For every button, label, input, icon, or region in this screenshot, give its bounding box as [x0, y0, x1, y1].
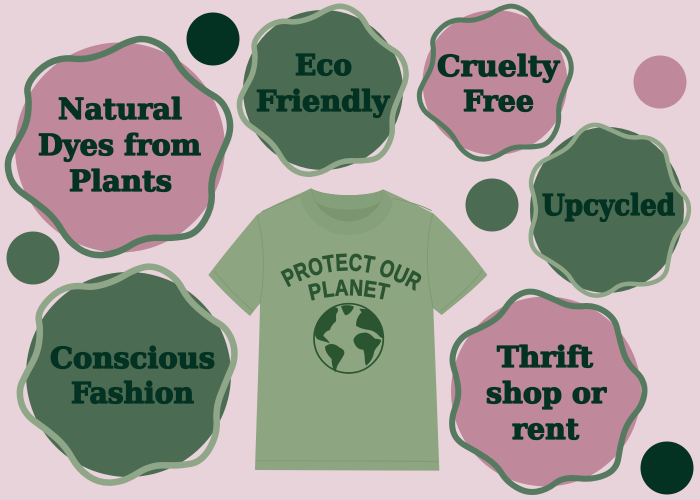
badge: Conscious Fashion: Fashion [71, 376, 194, 410]
South America [325, 344, 344, 372]
badge: Thrift shop or rent: shop or [486, 376, 607, 410]
inner back neck [311, 188, 383, 222]
decorative dot: pink top right [634, 56, 686, 108]
badge: Cruelty Free [419, 6, 571, 159]
badge: Cruelty Free: Cruelty [437, 49, 560, 83]
badge: Natural Dyes from Plants: Dyes from [38, 128, 201, 162]
badge: Thrift shop or rent [451, 292, 645, 492]
North America [315, 307, 338, 343]
t-shirt illustration [208, 188, 488, 471]
badge: Upcycled [530, 125, 689, 296]
badge: Eco Friendly [239, 6, 406, 174]
back collar band [311, 188, 383, 210]
badge: Thrift shop or rent: rent [512, 412, 580, 446]
badge: Natural Dyes from Plants: Plants [69, 164, 172, 198]
Greenland [341, 305, 354, 315]
badge: Thrift shop or rent: Thrift [497, 340, 594, 374]
Eurasia [356, 309, 383, 338]
shirt slogan: PROTECT OUR [287, 270, 413, 289]
decorative dot: dark green top [186, 12, 240, 66]
t-shirt illustration: PLANET [308, 279, 390, 300]
badge: Conscious Fashion: Conscious [50, 341, 215, 375]
badge: Cruelty Free: Free [463, 84, 534, 118]
badge: Conscious Fashion [20, 267, 234, 483]
shirt slogan: PLANET [311, 295, 389, 301]
badge: Natural Dyes from Plants [8, 39, 230, 255]
badge: Upcycled: Upcycled [542, 188, 675, 222]
shirt body [208, 188, 487, 471]
badge: Eco Friendly: Friendly [256, 84, 390, 118]
seams [214, 196, 482, 461]
t-shirt illustration: PROTECT OUR [280, 254, 422, 291]
badge: Eco Friendly: Eco [295, 48, 352, 82]
Africa [353, 333, 381, 366]
decorative dot: green left [6, 232, 60, 284]
front collar band [300, 188, 393, 235]
badge: Natural Dyes from Plants: Natural [58, 92, 182, 126]
globe icon [314, 304, 383, 373]
decorative dot: dark green bottom right [640, 442, 694, 494]
decorative dot: green centre right [466, 178, 518, 232]
